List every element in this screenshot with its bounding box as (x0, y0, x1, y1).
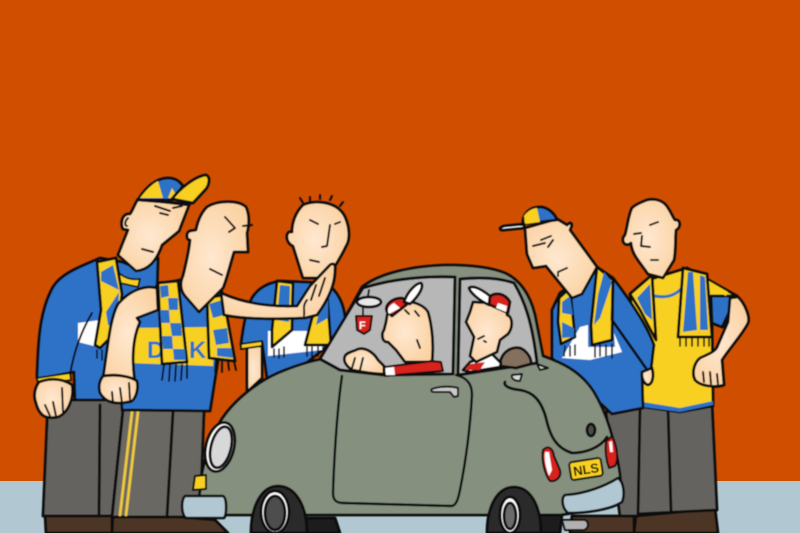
fan 1: capped man at far left (35, 175, 209, 533)
cap (523, 207, 557, 224)
side window (458, 278, 537, 375)
head (623, 199, 680, 278)
right scarf strip (678, 268, 712, 337)
arm and fist (693, 297, 749, 386)
number plate (569, 458, 603, 480)
scarf checks (158, 281, 187, 364)
bent left arm (103, 287, 158, 382)
car (182, 265, 624, 533)
number plate: NLS (572, 460, 600, 479)
door handle (431, 387, 458, 397)
all figures (35, 175, 749, 533)
hanging pennant with letter F (356, 290, 381, 334)
front wheel (251, 486, 307, 533)
collar (655, 288, 682, 297)
hand (642, 368, 653, 385)
fan 3: spiky haired man behind outstretched hand (241, 195, 349, 392)
fist (99, 375, 137, 403)
fan 5: bald man in yellow shirt at far right (623, 199, 749, 533)
driver (344, 283, 443, 376)
body (198, 265, 622, 515)
fuel cap (587, 424, 595, 436)
head (287, 202, 349, 278)
scarf (558, 288, 575, 344)
fan 4: man with cap leaning towards the car (500, 207, 654, 533)
scarf (95, 258, 122, 348)
hanging pennant with letter F: F (359, 320, 366, 332)
outstretched arm (221, 264, 335, 319)
windscreen (320, 277, 455, 375)
boot lid line (505, 382, 607, 453)
head (525, 219, 597, 298)
seat (500, 348, 531, 368)
fan 2: bald man pointing: D (147, 337, 164, 364)
front bumper (182, 496, 226, 518)
wiper details (512, 364, 548, 381)
cap (138, 178, 183, 200)
exhaust (562, 520, 588, 530)
left rear light (542, 448, 560, 481)
scarf (272, 281, 293, 347)
hand (35, 379, 72, 418)
head (118, 199, 189, 271)
indicator (193, 475, 206, 490)
left scarf strip (630, 275, 656, 340)
head (181, 202, 249, 312)
rear wheel (487, 487, 541, 533)
passenger (463, 287, 512, 372)
collar (118, 272, 140, 287)
door outline (333, 375, 472, 506)
headlight (200, 419, 240, 475)
fan 2: bald man pointing: K (189, 337, 207, 364)
rear tyre shadow (305, 514, 562, 533)
fan 2: bald man pointing (99, 202, 335, 533)
pale blue ground (0, 481, 800, 533)
rear bumper (563, 478, 624, 513)
right rear light (606, 436, 617, 468)
